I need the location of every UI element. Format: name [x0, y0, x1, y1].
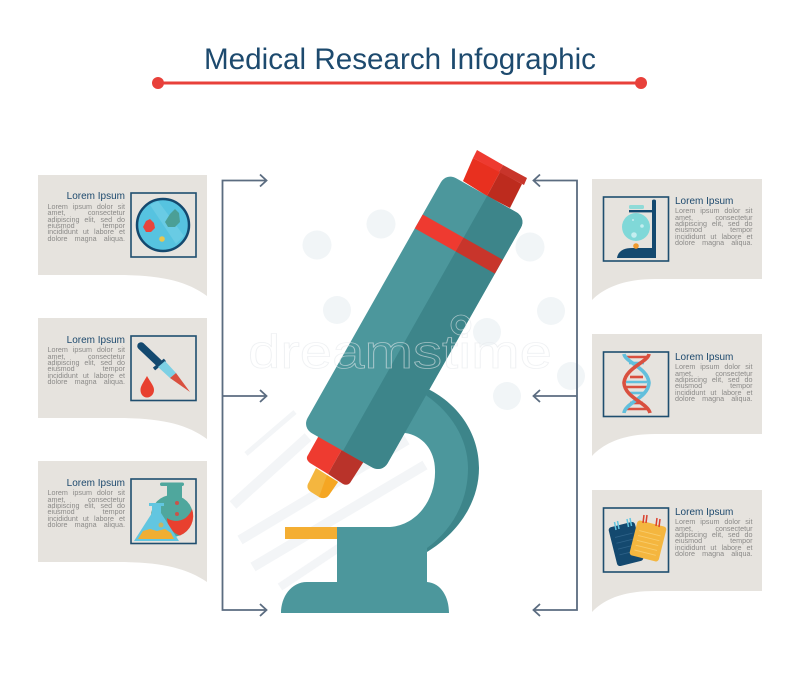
text: right 3: dolore magna aliqua. [675, 549, 752, 558]
text: left 1: incididunt ut labore et [48, 227, 125, 236]
text: left 2: amet, consectetur [48, 352, 125, 361]
panel: right 1 [592, 179, 762, 300]
text: right 2: adipiscing elit, sed do [675, 375, 752, 384]
panel: left 3 [38, 461, 207, 582]
microscope stand and base [281, 388, 479, 613]
icon: burner and flask [602, 196, 670, 262]
text: left 1: amet, consectetur [48, 208, 125, 217]
text: right 2: Lorem ipsum dolor sit [675, 362, 752, 371]
watermark: dreamstime [248, 325, 552, 378]
title [152, 43, 647, 89]
text: right 1: Lorem Ipsum [675, 196, 733, 206]
panel: left 2 [38, 318, 207, 439]
text: left 3 [48, 478, 125, 529]
text: right 2: dolore magna aliqua. [675, 394, 752, 403]
text: right 2: amet, consectetur [675, 369, 752, 378]
icon: petri dish [130, 192, 197, 258]
text: left 1: eiusmod tempor [48, 221, 125, 230]
text: left 2: Lorem ipsum dolor sit [48, 345, 125, 354]
text: right 2: Lorem Ipsum [675, 352, 733, 362]
text: right 1: Lorem ipsum dolor sit [675, 206, 752, 215]
text: right 1: eiusmod tempor [675, 225, 752, 234]
text: left 2: adipiscing elit, sed do [48, 358, 125, 367]
icon: dropper [130, 335, 197, 402]
objective lens [307, 430, 368, 498]
text: left 3: Lorem Ipsum [67, 478, 125, 488]
text: left 2: Lorem Ipsum [67, 334, 125, 346]
text: left 1: Lorem ipsum dolor sit [48, 202, 125, 211]
text: right 3: incididunt ut labore et [675, 543, 752, 552]
title text: Medical Research Infographic [204, 43, 596, 76]
text: right 3: eiusmod tempor [675, 536, 752, 545]
microscope tube [302, 173, 526, 473]
panel: right 2 [592, 334, 762, 456]
watermark [248, 314, 552, 378]
text: left 3: amet, consectetur [48, 495, 125, 504]
text: left 3: adipiscing elit, sed do [48, 501, 125, 510]
icon: flasks [130, 478, 197, 544]
text: left 1 [48, 191, 125, 243]
text: right 3: amet, consectetur [675, 524, 752, 533]
text: right 3: Lorem ipsum dolor sit [675, 517, 752, 526]
background decoration: circles and stripes [230, 210, 585, 590]
panel: right 3 [592, 490, 762, 612]
text: right 3: Lorem Ipsum [675, 506, 733, 518]
text: right 1: adipiscing elit, sed do [675, 219, 752, 228]
tube band [415, 214, 503, 274]
text: right 1 [675, 196, 752, 247]
title underline [152, 77, 647, 89]
text: right 2: eiusmod tempor [675, 381, 752, 390]
text: right 3: adipiscing elit, sed do [675, 530, 752, 539]
icon: notepads [602, 507, 670, 573]
text: left 2: eiusmod tempor [48, 364, 125, 373]
stage [285, 527, 337, 539]
text: right 1: amet, consectetur [675, 213, 752, 222]
text: left 3: eiusmod tempor [48, 507, 125, 516]
text: right 3 [675, 506, 752, 558]
text: right 1: dolore magna aliqua. [675, 238, 752, 247]
right bracket with arrows [532, 174, 578, 617]
text: right 2 [675, 352, 752, 403]
text: left 1: dolore magna aliqua. [48, 234, 125, 243]
text: left 3: dolore magna aliqua. [48, 520, 125, 529]
left bracket with arrows [222, 174, 268, 617]
eyepiece [463, 150, 527, 208]
text: left 1: Lorem Ipsum [67, 191, 125, 202]
microscope [281, 150, 527, 613]
text: left 1: adipiscing elit, sed do [48, 215, 125, 224]
text: right 1: incididunt ut labore et [675, 232, 752, 241]
text: left 3: Lorem ipsum dolor sit [48, 488, 125, 497]
panel: left 1 [38, 175, 207, 296]
text: left 3: incididunt ut labore et [48, 514, 125, 523]
text: left 2: incididunt ut labore et [48, 371, 125, 380]
icon: DNA helix [602, 351, 670, 418]
text: left 2: dolore magna aliqua. [48, 377, 125, 386]
text: left 2 [48, 334, 125, 386]
text: right 2: incididunt ut labore et [675, 388, 752, 397]
